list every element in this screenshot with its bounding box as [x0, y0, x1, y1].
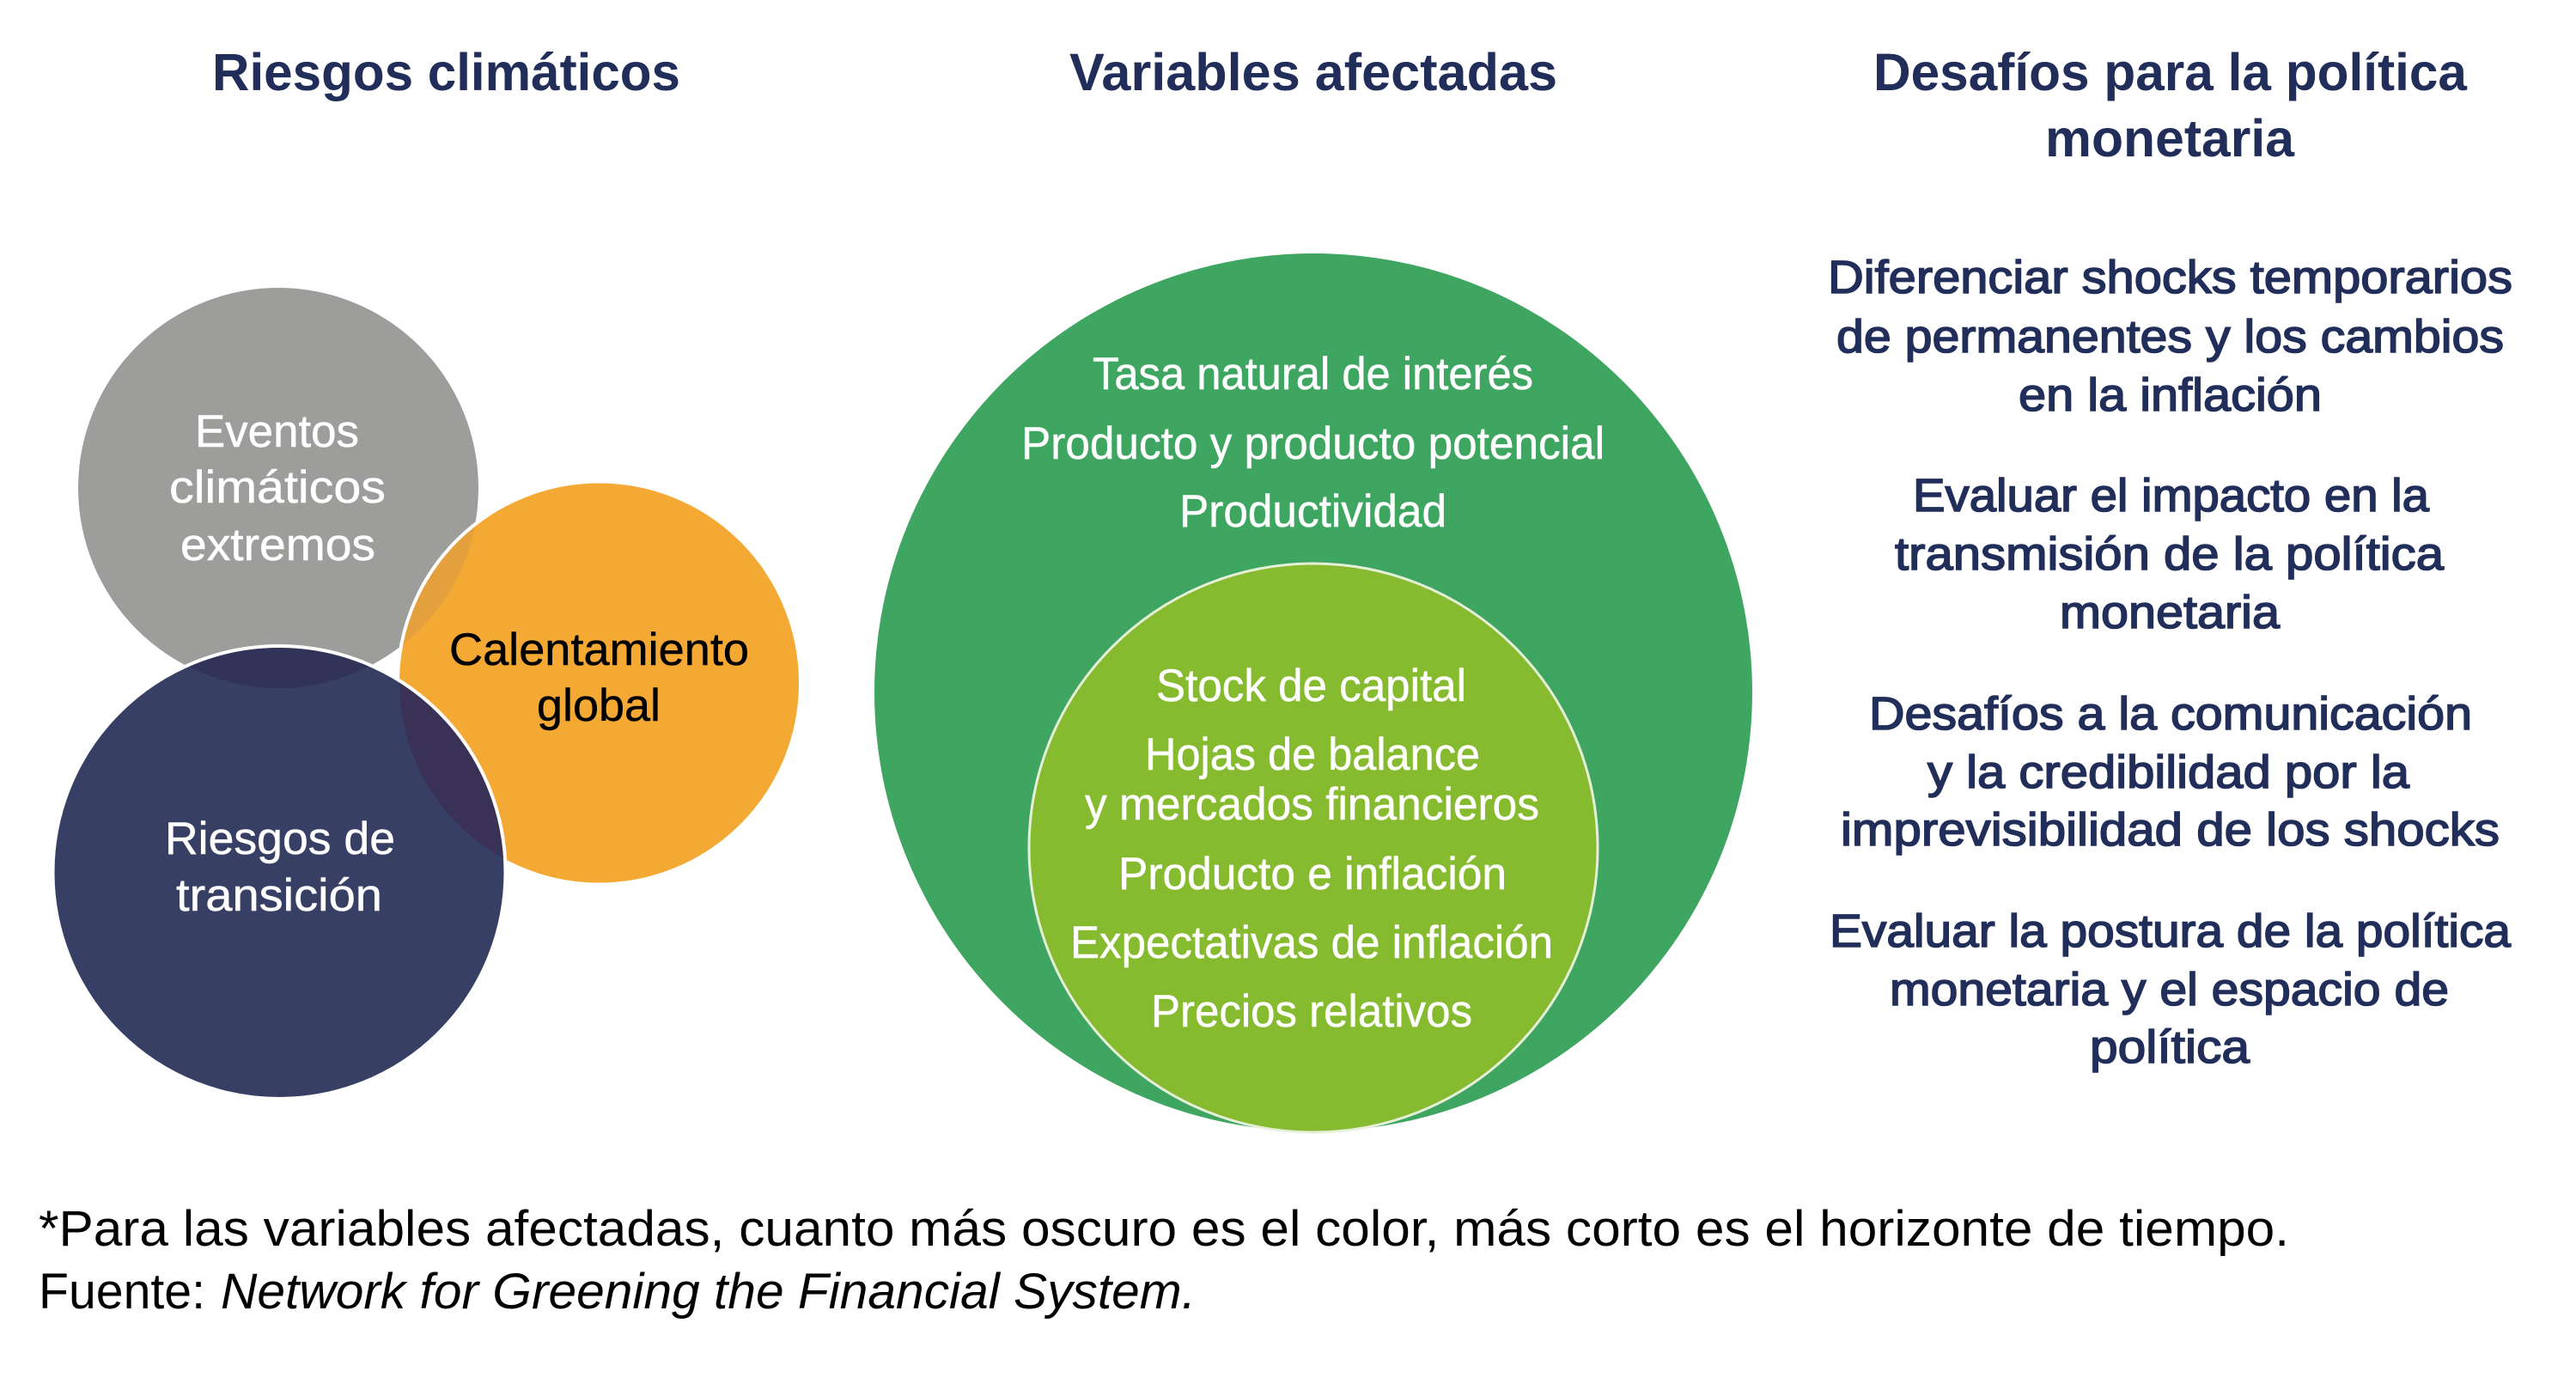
- label: eventos climáticos extremos: Eventos: [195, 406, 359, 457]
- panel: desafíos para la política monetaria: [1828, 43, 2512, 1073]
- text: comunicación y credibilidad: y la credibilidad por la: [1927, 747, 2410, 798]
- list: variables de largo plazo: [1021, 349, 1605, 537]
- footnote and source: Fuente:: [39, 1264, 205, 1320]
- list: variables de corto plazo: Hojas de balance: [1145, 729, 1480, 780]
- heading: desafíos para la política monetaria: [1873, 43, 2468, 168]
- list: variables de largo plazo: Productividad: [1179, 486, 1446, 537]
- text: evaluar impacto: monetaria: [2060, 587, 2281, 638]
- list: variables de largo plazo: Tasa natural de interés: [1093, 349, 1533, 399]
- label: riesgos de transición: [165, 814, 395, 921]
- circle: calentamiento global: [398, 481, 801, 885]
- overlap: riesgos de transición and calentamiento: [399, 682, 503, 858]
- text: diferenciar shocks: Diferenciar shocks temporarios: [1828, 252, 2512, 303]
- label: riesgos de transición: transición: [176, 870, 382, 921]
- label: calentamiento global: Calentamiento: [449, 625, 749, 675]
- list: variables de largo plazo: Producto y producto potencial: [1021, 418, 1605, 469]
- list: variables de corto plazo: Producto e inflación: [1118, 849, 1507, 899]
- text: diferenciar shocks: en la inflación: [2019, 369, 2322, 421]
- inner circle: corto plazo: [1029, 564, 1598, 1132]
- text: diferenciar shocks: [1828, 252, 2512, 421]
- text: evaluar impacto: transmisión de la política: [1895, 528, 2445, 580]
- label: eventos climáticos extremos: [169, 406, 386, 570]
- label: calentamiento global: [449, 625, 749, 731]
- circle: eventos climáticos extremos: [78, 288, 478, 688]
- list: variables de corto plazo: Precios relativos: [1151, 986, 1472, 1037]
- panel: riesgos climáticos: [53, 43, 801, 1099]
- text: comunicación y credibilidad: Desafíos a la comunicación: [1869, 688, 2472, 740]
- text: evaluar impacto: [1895, 470, 2445, 638]
- list: variables de corto plazo: y mercados financieros: [1085, 779, 1539, 830]
- list: variables de corto plazo: Expectativas de inflación: [1070, 917, 1553, 968]
- text: postura de política: [1830, 905, 2512, 1073]
- heading: variables afectadas: Variables afectadas: [1069, 43, 1557, 101]
- label: eventos climáticos extremos: extremos: [180, 520, 375, 570]
- label: calentamiento global: global: [537, 680, 661, 731]
- text: postura de política: Evaluar la postura de la política: [1830, 905, 2512, 957]
- overlap: eventos and calentamiento: [403, 527, 474, 644]
- circle: riesgos de transición: [53, 646, 505, 1099]
- text: comunicación y credibilidad: [1841, 688, 2500, 856]
- heading: desafíos para la política monetaria: Desafíos para la política: [1873, 43, 2468, 101]
- footnote and source: *Para las variables afectadas, cuanto más oscuro es el color, más corto es el horizonte de tiempo.: [39, 1201, 2289, 1257]
- heading: riesgos climáticos: Riesgos climáticos: [212, 43, 680, 101]
- label: riesgos de transición: Riesgos de: [165, 814, 395, 864]
- outer circle: largo plazo: [874, 253, 1752, 1131]
- footnote and source: Network for Greening the Financial System.: [221, 1264, 1196, 1320]
- text: comunicación y credibilidad: imprevisibilidad de los shocks: [1841, 804, 2500, 856]
- text: postura de política: monetaria y el espacio de: [1890, 964, 2449, 1015]
- text: diferenciar shocks: de permanentes y los cambios: [1836, 311, 2504, 363]
- text: postura de política: política: [2090, 1021, 2250, 1073]
- footnote and source: [39, 1201, 2289, 1320]
- text: evaluar impacto: Evaluar el impacto en la: [1913, 470, 2430, 521]
- panel: variables afectadas: [874, 43, 1752, 1132]
- heading: desafíos para la política monetaria: monetaria: [2045, 109, 2295, 168]
- list: variables de corto plazo: [1070, 661, 1553, 1037]
- list: variables de corto plazo: Stock de capital: [1156, 661, 1466, 711]
- overlap: riesgos de transición and eventos: [189, 648, 369, 688]
- label: eventos climáticos extremos: climáticos: [169, 462, 386, 513]
